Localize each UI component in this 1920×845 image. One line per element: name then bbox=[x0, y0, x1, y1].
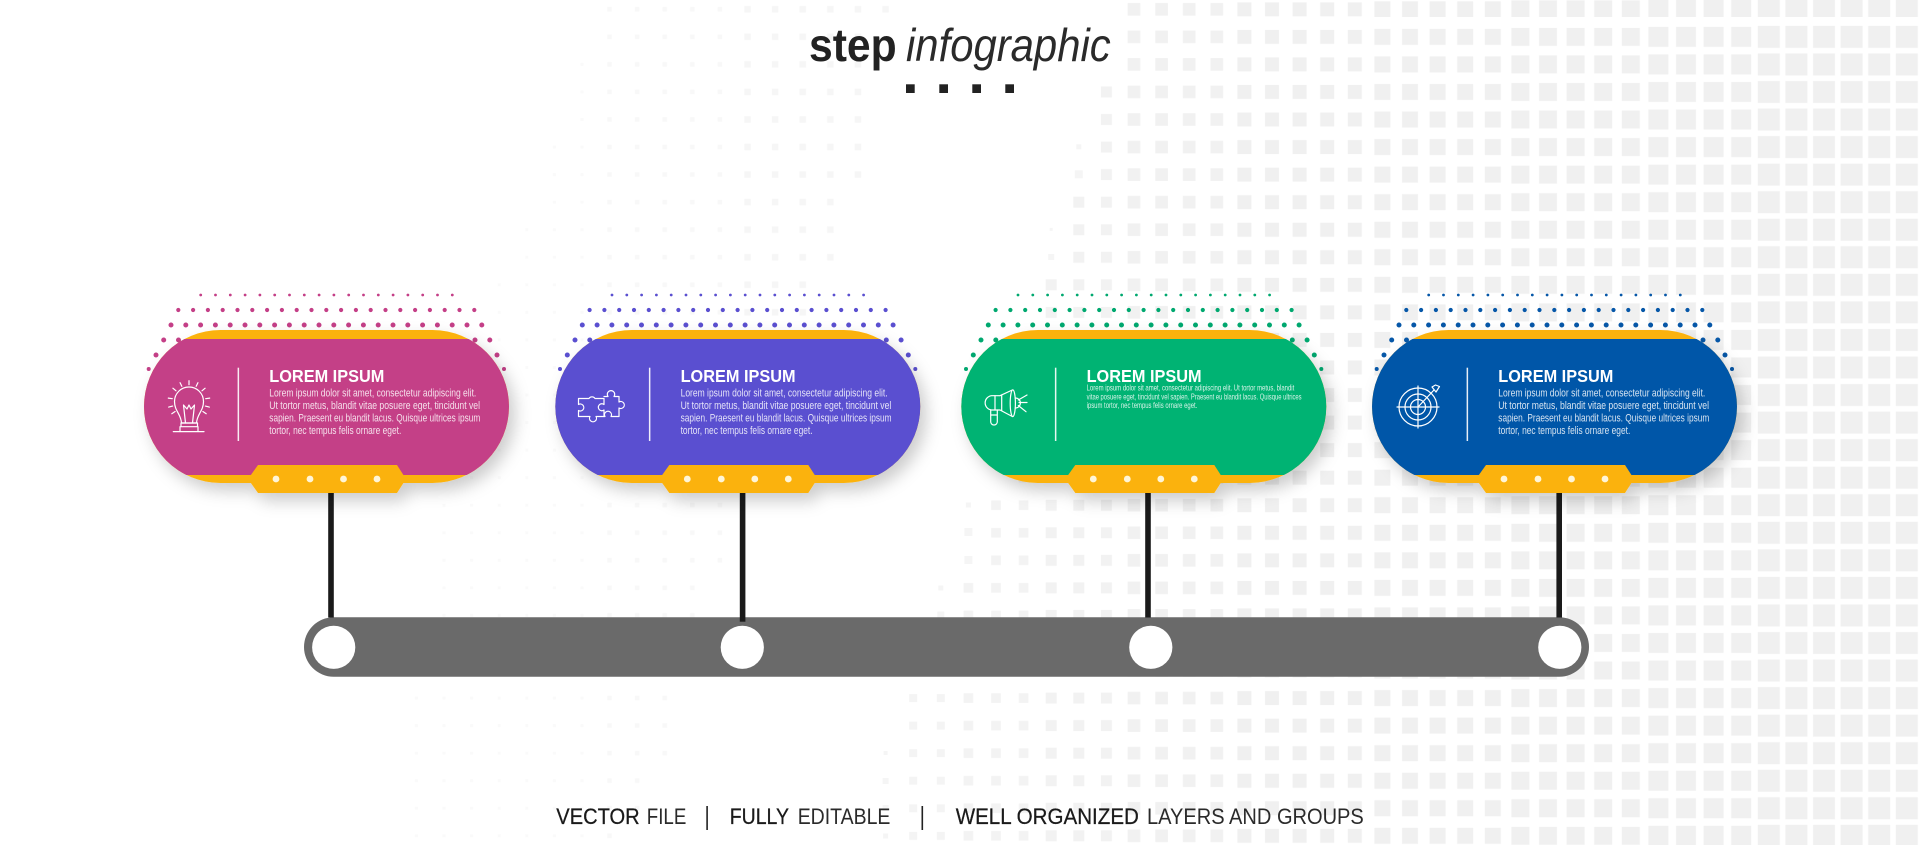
pill body bbox=[555, 330, 920, 493]
body text (small) bbox=[1087, 382, 1302, 410]
icon: light bulb bbox=[168, 381, 210, 432]
title bbox=[809, 19, 1111, 71]
heading: LOREM IPSUM bbox=[1087, 366, 1202, 386]
icon: puzzle pieces bbox=[578, 391, 624, 422]
heading: LOREM IPSUM bbox=[269, 366, 384, 386]
divider bbox=[1467, 368, 1468, 441]
divider bbox=[1055, 368, 1056, 441]
dot halftone arc bbox=[149, 295, 504, 369]
body text: Ut tortor metus, blandit vitae posuere eget, tincidunt vel bbox=[1498, 400, 1709, 412]
body text: sapien. Praesent eu blandit lacus. Quisque ultrices ipsum bbox=[681, 412, 892, 424]
body text bbox=[1498, 388, 1709, 437]
pill body bbox=[144, 330, 509, 493]
footer caption bbox=[556, 804, 1364, 830]
connector 3 bbox=[1145, 490, 1151, 618]
timeline node 4 bbox=[1538, 626, 1581, 669]
connector 1 bbox=[328, 490, 334, 618]
body text (small): ipsum tortor, nec tempus felis ornare eget. bbox=[1087, 400, 1197, 410]
body text: tortor, nec tempus felis ornare eget. bbox=[269, 425, 401, 437]
divider bbox=[238, 368, 239, 441]
footer caption: WELL ORGANIZED bbox=[956, 804, 1139, 829]
body text: Lorem ipsum dolor sit amet, consectetur adipiscing elit. bbox=[681, 388, 888, 400]
divider bbox=[649, 368, 650, 441]
body text (small): vitae posuere eget, tincidunt vel sapien. Praesent eu blandit lacus. Quisque ultrices bbox=[1087, 392, 1302, 402]
footer caption: FULLY bbox=[730, 804, 789, 829]
panel: step 1 magenta bbox=[144, 295, 509, 493]
icon: target with arrow bbox=[1397, 385, 1440, 428]
body text: Ut tortor metus, blandit vitae posuere eget, tincidunt vel bbox=[269, 400, 480, 412]
footer caption: LAYERS AND GROUPS bbox=[1147, 804, 1364, 829]
body text bbox=[681, 388, 892, 437]
title: infographic bbox=[906, 19, 1111, 71]
timeline node 2 bbox=[721, 626, 764, 669]
dot halftone arc bbox=[966, 295, 1322, 369]
heading: LOREM IPSUM bbox=[1498, 366, 1613, 386]
connector 4 bbox=[1556, 490, 1562, 618]
heading: LOREM IPSUM bbox=[681, 366, 796, 386]
body text: sapien. Praesent eu blandit lacus. Quisque ultrices ipsum bbox=[1498, 412, 1709, 424]
title: step bbox=[809, 19, 897, 71]
body text: Lorem ipsum dolor sit amet, consectetur adipiscing elit. bbox=[269, 388, 476, 400]
badge dots bbox=[1090, 476, 1198, 482]
panel: step 2 purple bbox=[555, 295, 920, 493]
title decoration: four squares bbox=[906, 84, 1014, 93]
body text: Ut tortor metus, blandit vitae posuere eget, tincidunt vel bbox=[681, 400, 891, 412]
timeline bar bbox=[304, 617, 1589, 677]
panel: step 3 green bbox=[961, 295, 1326, 493]
timeline node 3 bbox=[1129, 626, 1172, 669]
dot halftone arc bbox=[560, 295, 916, 369]
footer caption: VECTOR bbox=[556, 804, 640, 829]
connector 2 bbox=[740, 490, 745, 622]
timeline node 1 bbox=[312, 626, 355, 669]
badge dots bbox=[1501, 476, 1608, 482]
footer caption: EDITABLE bbox=[798, 804, 890, 829]
body text: tortor, nec tempus felis ornare eget. bbox=[1498, 425, 1630, 437]
body text (small): Lorem ipsum dolor sit amet, consectetur adipiscing elit. Ut tortor metus, blandit bbox=[1087, 382, 1295, 392]
body text: tortor, nec tempus felis ornare eget. bbox=[681, 425, 813, 437]
panel: step 4 blue bbox=[1372, 295, 1737, 493]
body text bbox=[269, 388, 480, 437]
body text: sapien. Praesent eu blandit lacus. Quisque ultrices ipsum bbox=[269, 412, 480, 424]
badge dots bbox=[684, 476, 792, 482]
icon: megaphone bbox=[985, 390, 1027, 425]
footer caption: FILE bbox=[647, 804, 686, 829]
badge dots bbox=[273, 476, 380, 482]
dot halftone arc bbox=[1377, 295, 1732, 369]
pill body bbox=[961, 330, 1326, 493]
pill body bbox=[1372, 330, 1737, 493]
body text: Lorem ipsum dolor sit amet, consectetur adipiscing elit. bbox=[1498, 388, 1705, 400]
